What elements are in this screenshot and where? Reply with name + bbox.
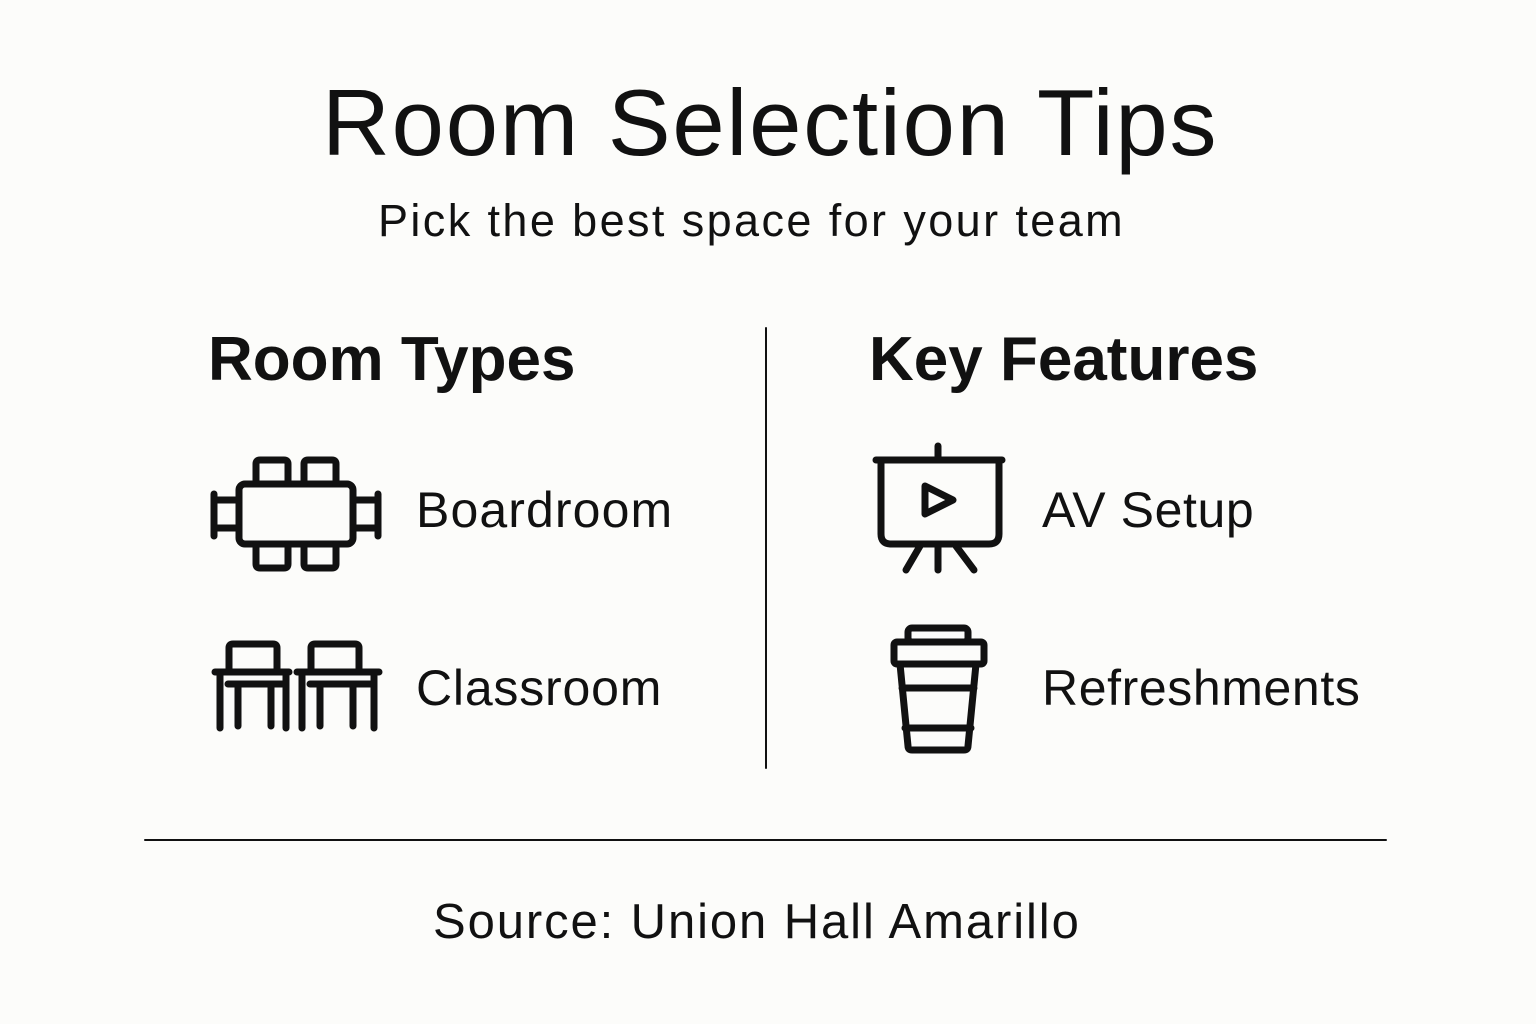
- label: boardroom: Boardroom: [416, 482, 673, 538]
- icon: boardroom table: [214, 460, 378, 568]
- title: Room Selection Tips: [322, 70, 1218, 175]
- icon: coffee cup: [894, 628, 984, 750]
- source: Source: Union Hall Amarillo: [433, 895, 1081, 949]
- label: av setup: AV Setup: [1042, 482, 1254, 538]
- label: classroom: Classroom: [416, 660, 662, 716]
- heading: room types: Room Types: [208, 325, 575, 394]
- subtitle: Pick the best space for your team: [378, 195, 1125, 246]
- icon: av screen: [876, 446, 1002, 570]
- heading: key features: Key Features: [869, 325, 1258, 394]
- icon: classroom desks: [215, 644, 379, 728]
- label: refreshments: Refreshments: [1042, 660, 1360, 716]
